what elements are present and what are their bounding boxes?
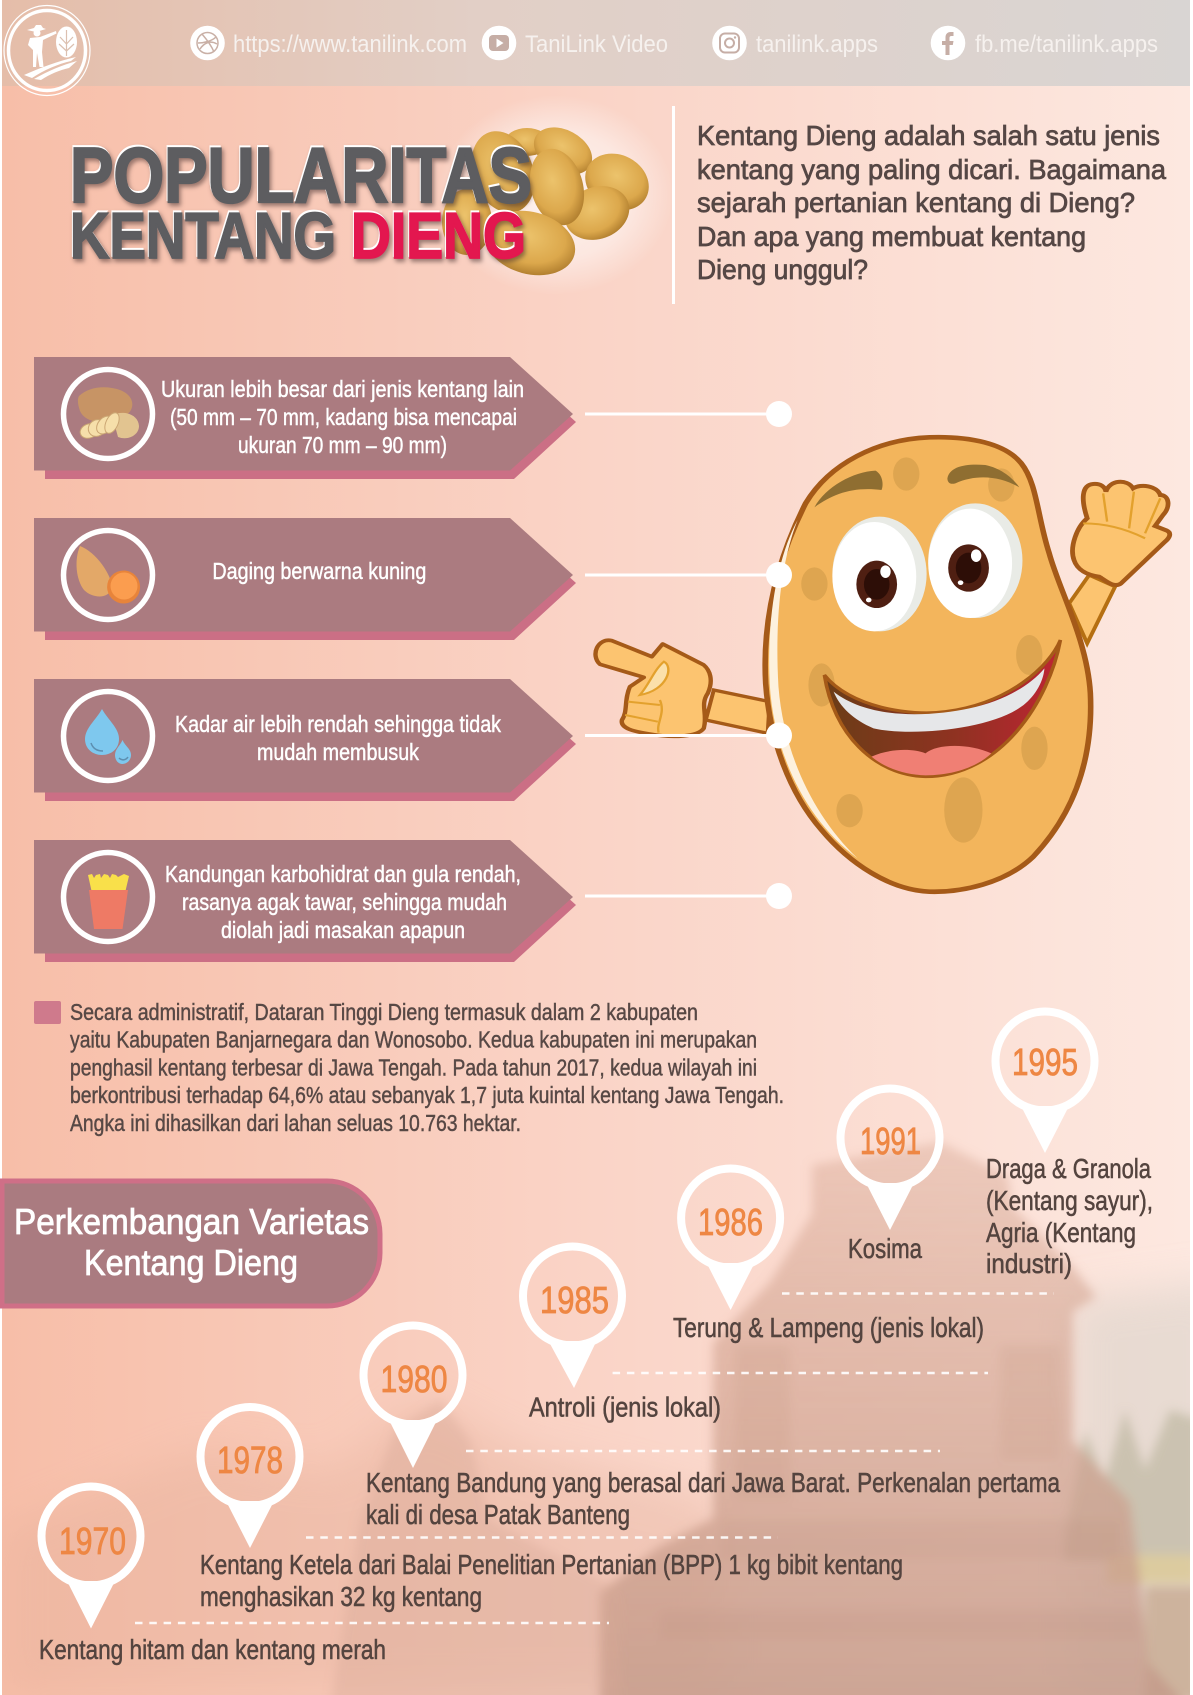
pin: 1995: 1995 bbox=[1012, 1042, 1078, 1084]
icon: french fries bbox=[88, 874, 129, 929]
label: 1978: Kentang Ketela dari Balai Penelitian Pertanian (BPP) 1 kg bibit kentang bbox=[200, 1549, 903, 1580]
eyes bbox=[832, 517, 927, 631]
panel: carbohydrates: rasanya agak tawar, sehingga mudah bbox=[182, 889, 507, 915]
panel: carbohydrates bbox=[34, 840, 576, 962]
heading: variety development bbox=[2, 1181, 380, 1306]
right hand bbox=[1073, 482, 1170, 585]
text block: administrative info: yaitu Kabupaten Banjarnegara dan Wonosobo. Kedua kabupaten ini merupakan bbox=[70, 1026, 757, 1052]
body bbox=[765, 437, 1091, 892]
intro text: Dieng unggul? bbox=[697, 254, 868, 285]
heading: variety development: Kentang Dieng bbox=[84, 1242, 298, 1283]
label: 1980 bbox=[366, 1467, 1060, 1530]
social link: video bbox=[482, 26, 668, 60]
label: 1978: menghasikan 32 kg kentang bbox=[200, 1581, 482, 1612]
panel: carbohydrates: diolah jadi masakan apapun bbox=[221, 917, 465, 943]
social link: website: https://www.tanilink.com bbox=[233, 31, 467, 58]
title: KENTANG bbox=[70, 199, 336, 272]
pin: 1986 bbox=[681, 1168, 780, 1310]
text block: administrative info: penghasil kentang terbesar di Jawa Tengah. Pada tahun 2017, kedua wilayah ini bbox=[70, 1054, 757, 1080]
label: 1995: industri) bbox=[986, 1248, 1072, 1279]
pin: 1991: 1991 bbox=[860, 1121, 921, 1163]
pin: 1978: 1978 bbox=[217, 1440, 283, 1482]
social link: facebook: fb.me/tanilink.apps bbox=[975, 31, 1158, 58]
left arm bbox=[706, 690, 770, 733]
text block: administrative info: Angka ini dihasilkan dari lahan seluas 10.763 hektar. bbox=[70, 1110, 521, 1136]
label: 1995 bbox=[986, 1153, 1153, 1279]
connector lines over mascot bbox=[585, 562, 792, 909]
intro text: sejarah pertanian kentang di Dieng? bbox=[697, 187, 1135, 218]
timeline dashed lines bbox=[135, 1294, 1054, 1623]
label: 1995: Draga & Granola bbox=[986, 1153, 1151, 1184]
panel: water content: Kadar air lebih rendah sehingga tidak bbox=[175, 711, 501, 737]
spots bbox=[801, 457, 1048, 843]
left hand bbox=[595, 640, 711, 736]
label: 1991: Kosima bbox=[848, 1233, 922, 1264]
pin: 1970 bbox=[42, 1486, 140, 1628]
pin: 1985: 1985 bbox=[540, 1280, 609, 1322]
text block: administrative info: berkontribusi terhadap 64,6% atau sebanyak 1,7 juta kuintal kentang Jawa Tengah. bbox=[70, 1082, 784, 1108]
panel: water content: mudah membusuk bbox=[257, 739, 419, 765]
panel: water content bbox=[34, 679, 576, 801]
illustration: potatoes bbox=[437, 95, 673, 295]
pin: 1991 bbox=[840, 1088, 940, 1230]
mouth bbox=[824, 640, 1060, 777]
panel: size: (50 mm – 70 mm, kadang bisa mencapai bbox=[170, 404, 517, 430]
panel: size bbox=[34, 357, 576, 479]
potato mascot bbox=[595, 437, 1170, 892]
title bbox=[70, 131, 532, 272]
panel: carbohydrates: Kandungan karbohidrat dan gula rendah, bbox=[165, 861, 521, 887]
pin: 1978 bbox=[200, 1407, 300, 1548]
intro text bbox=[697, 120, 1166, 285]
panel: flesh colour bbox=[34, 518, 576, 640]
pin: 1995 bbox=[996, 1012, 1094, 1153]
label: 1980: kali di desa Patak Banteng bbox=[366, 1499, 630, 1530]
intro text: kentang yang paling dicari. Bagaimana bbox=[697, 154, 1166, 185]
icon: water drops bbox=[85, 709, 131, 764]
text block: administrative info bbox=[34, 999, 784, 1136]
heading: variety development: Perkembangan Varietas bbox=[14, 1201, 369, 1242]
title: DIENG bbox=[351, 199, 526, 272]
pin: 1986: 1986 bbox=[698, 1202, 763, 1244]
intro text: Kentang Dieng adalah salah satu jenis bbox=[697, 120, 1160, 151]
label: 1986: Terung & Lampeng (jenis lokal) bbox=[673, 1312, 984, 1343]
pin: 1985 bbox=[523, 1246, 622, 1388]
social link: facebook bbox=[931, 26, 1158, 60]
icon: sweet yellow potato bbox=[77, 546, 140, 604]
logo bbox=[4, 6, 90, 96]
intro text: Dan apa yang membuat kentang bbox=[697, 221, 1086, 252]
social link: instagram bbox=[712, 26, 878, 60]
eyebrows bbox=[814, 471, 883, 507]
panel: size: ukuran 70 mm – 90 mm) bbox=[238, 432, 447, 458]
social link: video: TaniLink Video bbox=[525, 31, 668, 58]
pin: 1980: 1980 bbox=[380, 1359, 448, 1401]
label: 1970: Kentang hitam dan kentang merah bbox=[39, 1634, 386, 1665]
pin: 1970: 1970 bbox=[59, 1521, 126, 1563]
panel: size: Ukuran lebih besar dari jenis kentang lain bbox=[161, 376, 524, 402]
label: 1985: Antroli (jenis lokal) bbox=[529, 1392, 721, 1422]
text block: administrative info: Secara administratif, Dataran Tinggi Dieng termasuk dalam 2 kabupaten bbox=[70, 999, 698, 1025]
icon: potato slices bbox=[78, 387, 139, 441]
label: 1995: Agria (Kentang bbox=[986, 1217, 1136, 1248]
label: 1995: (Kentang sayur), bbox=[986, 1185, 1153, 1216]
title: POPULARITAS bbox=[70, 131, 532, 219]
header band bbox=[2, 0, 1190, 86]
connector line: size bbox=[585, 401, 792, 427]
pin: 1980 bbox=[364, 1326, 462, 1468]
right arm bbox=[1069, 575, 1115, 643]
label: 1978 bbox=[200, 1549, 903, 1612]
social link: instagram: tanilink.apps bbox=[756, 31, 878, 58]
panel: flesh colour: Daging berwarna kuning bbox=[212, 558, 426, 584]
social link: website bbox=[190, 26, 467, 60]
